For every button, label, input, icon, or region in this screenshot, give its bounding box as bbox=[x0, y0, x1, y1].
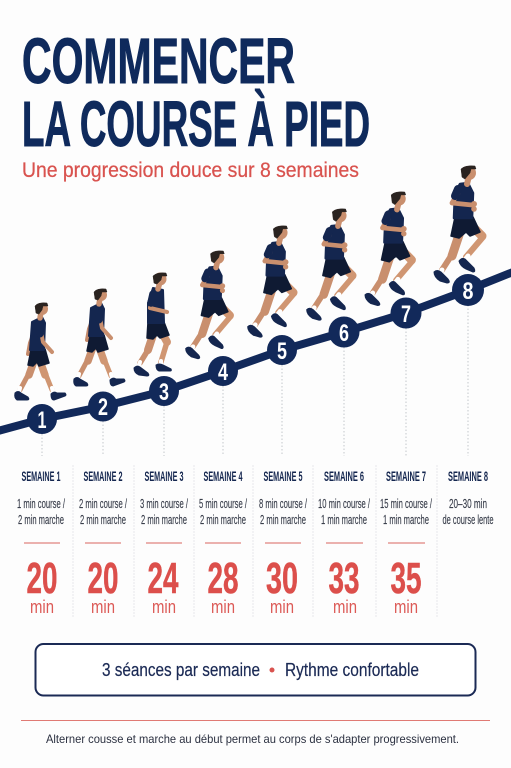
column: week 1: SEMAINE 1 bbox=[22, 469, 61, 484]
marker 6 bbox=[328, 316, 360, 348]
marker 8: 8 bbox=[462, 278, 474, 305]
column: week 5: SEMAINE 5 bbox=[264, 469, 303, 484]
marker 3: 3 bbox=[159, 379, 169, 406]
column: week 6: 10 min course / bbox=[318, 497, 370, 511]
column: week 5: min bbox=[270, 597, 294, 617]
footer rule bbox=[21, 720, 490, 722]
column: week 4 bbox=[199, 469, 247, 617]
marker 5: 5 bbox=[277, 338, 287, 365]
figure: week 1 walker bbox=[15, 303, 66, 400]
column: week 7: SEMAINE 7 bbox=[386, 469, 426, 484]
column: week 3 bbox=[140, 469, 188, 617]
progress line with week markers bbox=[0, 272, 511, 434]
figure: week 6 runner bbox=[307, 209, 353, 320]
figure: week 7 runner bbox=[365, 192, 413, 305]
column: week 6 bbox=[318, 469, 370, 617]
column: week 8: 20–30 min bbox=[449, 497, 487, 511]
dotted connectors bbox=[42, 305, 468, 456]
column: week 4: min bbox=[211, 597, 235, 617]
column: week 1: 20 bbox=[26, 554, 58, 603]
title bbox=[22, 25, 370, 160]
callout box: 3 séances par semaine bbox=[102, 660, 260, 680]
column: week 3: 24 bbox=[148, 554, 179, 603]
figure: week 5 runner bbox=[248, 226, 294, 337]
callout box: Rythme confortable bbox=[285, 660, 419, 680]
marker 5 bbox=[267, 335, 297, 365]
column: week 2 bbox=[79, 469, 127, 617]
marker 2 bbox=[88, 392, 118, 422]
column: week 1: min bbox=[30, 597, 54, 617]
marker 3 bbox=[149, 376, 179, 406]
marker 4 bbox=[208, 356, 238, 386]
column: week 1 bbox=[17, 469, 65, 617]
column: week 4: 28 bbox=[208, 554, 238, 603]
column: week 7: min bbox=[394, 597, 418, 617]
column: week 4: 2 min marche bbox=[200, 513, 246, 527]
column: week 3: 2 min marche bbox=[141, 513, 187, 527]
column: week 6: 1 min marche bbox=[321, 513, 367, 527]
column: week 5: 30 bbox=[266, 554, 298, 603]
column: week 2: 2 min course / bbox=[79, 497, 127, 511]
marker 7 bbox=[390, 298, 422, 328]
column: week 5 bbox=[259, 469, 307, 617]
column: week 6: 33 bbox=[328, 554, 360, 603]
column: week 6: SEMAINE 6 bbox=[324, 469, 364, 484]
figure: week 3 jogger bbox=[134, 272, 171, 376]
column: week 5: 2 min marche bbox=[260, 513, 306, 527]
column: week 2: SEMAINE 2 bbox=[84, 469, 122, 484]
column: week 2: 2 min marche bbox=[80, 513, 126, 527]
column: week 7 bbox=[380, 469, 432, 617]
column: week 3: 3 min course / bbox=[140, 497, 188, 511]
marker 1: 1 bbox=[38, 407, 46, 434]
subtitle: Une progression douce sur 8 semaines bbox=[22, 159, 359, 182]
footer note: Alterner cousse et marche au début permet au corps de s'adapter progressivement. bbox=[46, 732, 459, 746]
column: week 1: 1 min course / bbox=[17, 497, 65, 511]
column: week 7: 1 min marche bbox=[383, 513, 429, 527]
column: week 7: 35 bbox=[390, 554, 422, 603]
marker 4: 4 bbox=[218, 359, 228, 386]
column: week 5: 8 min course / bbox=[259, 497, 307, 511]
column: week 1: 2 min marche bbox=[18, 513, 64, 527]
figure: week 8 runner bbox=[434, 166, 483, 283]
callout box bbox=[36, 644, 476, 696]
marker 7: 7 bbox=[401, 301, 411, 328]
marker 8 bbox=[452, 274, 484, 306]
marker 6: 6 bbox=[339, 320, 349, 347]
marker 2: 2 bbox=[98, 394, 108, 421]
column: week 2: min bbox=[91, 597, 115, 617]
runners progression bbox=[15, 166, 483, 400]
column: week 3: SEMAINE 3 bbox=[144, 469, 184, 484]
column: week 6: min bbox=[333, 597, 357, 617]
column: week 3: min bbox=[152, 597, 176, 617]
column: week 4: SEMAINE 4 bbox=[204, 469, 243, 484]
column: week 2: 20 bbox=[88, 554, 118, 603]
column: week 8 bbox=[442, 469, 494, 527]
figure: week 2 walker bbox=[74, 289, 125, 386]
column: week 4: 5 min course / bbox=[199, 497, 247, 511]
column: week 7: 15 min course / bbox=[380, 497, 432, 511]
column dividers bbox=[73, 465, 437, 618]
figure: week 4 runner bbox=[186, 251, 231, 359]
title: COMMENCER bbox=[22, 25, 295, 97]
marker 1 bbox=[27, 404, 57, 434]
